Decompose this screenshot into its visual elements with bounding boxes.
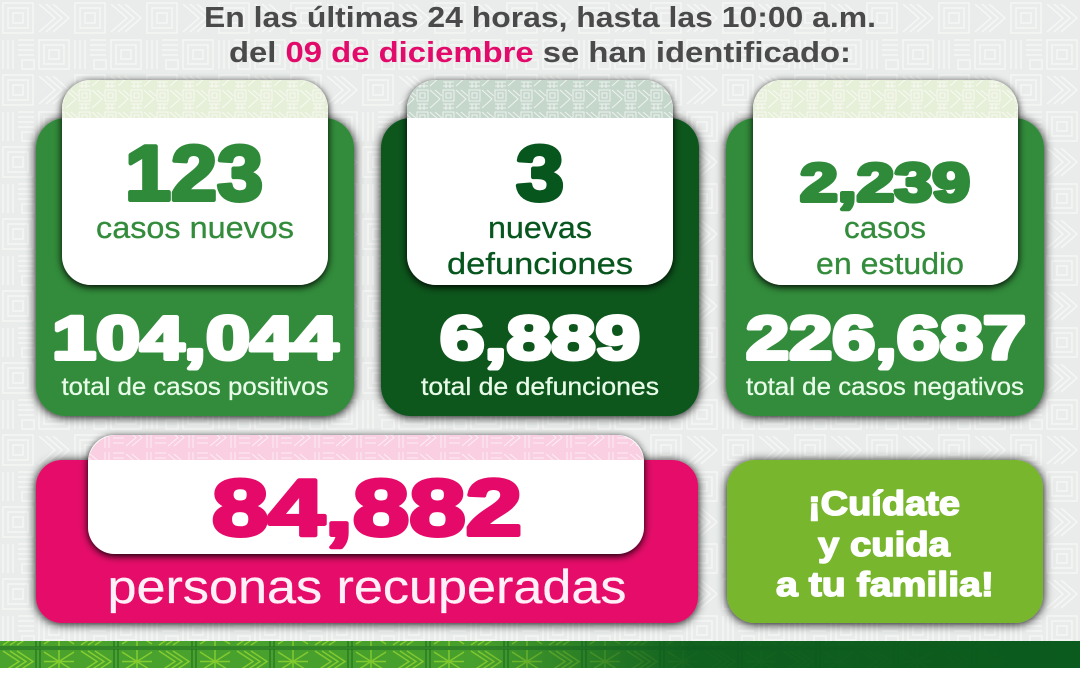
panel: mensaje (727, 460, 1043, 623)
number: total positivos: 104,044 (52, 304, 338, 372)
number: nuevas defunciones: 3 (516, 129, 564, 217)
title: del 09 de diciembre se han identificado: (229, 37, 851, 69)
label: casos nuevos: casos nuevos (96, 210, 294, 245)
label: recuperadas: personas recuperadas (108, 560, 626, 613)
label: casos en estudio: en estudio (816, 246, 964, 281)
message text: y cuida (818, 526, 951, 564)
label: casos en estudio: casos (844, 210, 926, 245)
footer band (0, 641, 1080, 668)
label: nuevas defunciones: nuevas (488, 210, 592, 245)
message text: a tu familia! (776, 566, 994, 604)
panel: personas recuperadas (36, 435, 698, 623)
title (204, 2, 876, 69)
decorative tab (753, 80, 1018, 118)
decorative tab (62, 80, 328, 118)
label: nuevas defunciones (447, 210, 633, 281)
number: total negativos: 226,687 (746, 304, 1026, 372)
panel: casos negativos (726, 80, 1044, 416)
label: nuevas defunciones: defunciones (447, 246, 633, 281)
label: total positivos: total de casos positivos (62, 373, 328, 401)
label: casos en estudio (816, 210, 964, 281)
number: casos en estudio: 2,239 (800, 153, 970, 213)
number: total defunciones: 6,889 (440, 304, 640, 372)
label: total negativos: total de casos negativos (746, 373, 1024, 401)
number: casos nuevos: 123 (125, 129, 263, 217)
panel: casos positivos (36, 80, 354, 416)
label: total defunciones: total de defunciones (421, 373, 659, 401)
decorative tab (88, 435, 644, 460)
message text: ¡Cuídate (808, 485, 960, 523)
message text (776, 485, 994, 604)
title: En las últimas 24 horas, hasta las 10:00 a.m. (204, 2, 876, 34)
number: recuperadas: 84,882 (212, 463, 522, 552)
panel: defunciones (381, 80, 699, 416)
decorative tab (407, 80, 673, 118)
